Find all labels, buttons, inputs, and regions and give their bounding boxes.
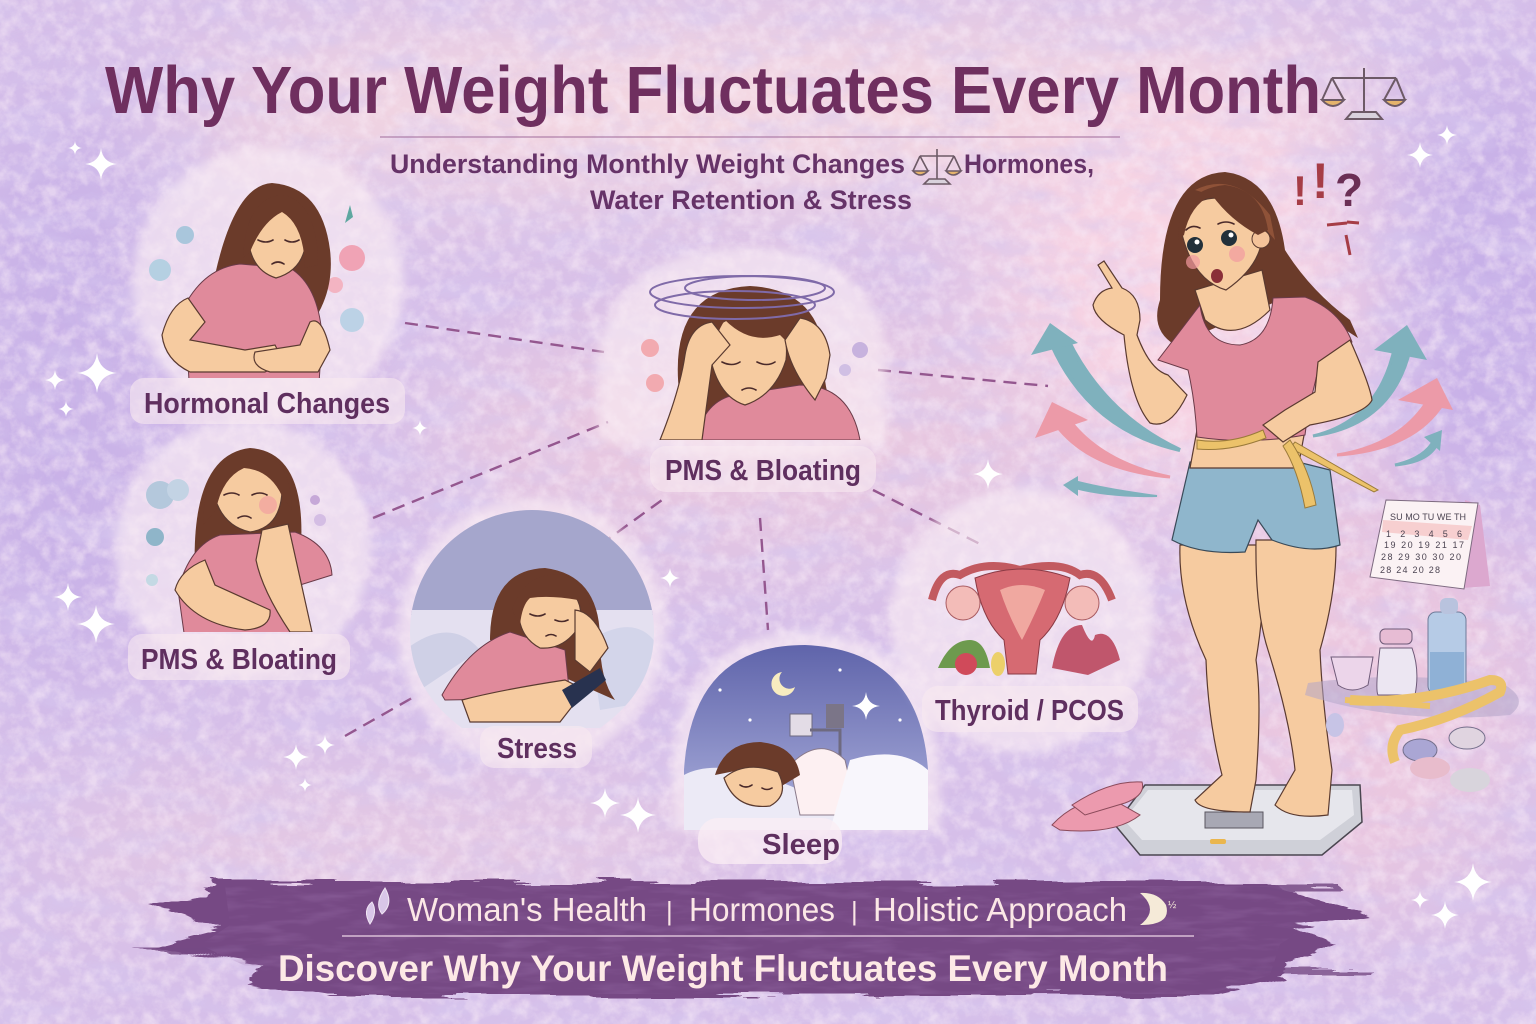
title: Why Your Weight Fluctuates Every Month — [105, 53, 1321, 128]
main figure: woman on scale — [1093, 172, 1378, 855]
label — [922, 686, 1138, 732]
calendar: 1 2 3 4 5 6 — [1386, 529, 1462, 539]
midriff — [1190, 430, 1305, 468]
scale — [1115, 785, 1362, 855]
stones — [1403, 739, 1437, 761]
banner: bottom brush stroke — [130, 882, 1370, 996]
vignette scene: woman holding head — [641, 286, 868, 440]
banner line 1: Holistic Approach — [873, 891, 1127, 928]
arrow: teal right — [1313, 325, 1427, 436]
label: Thyroid / PCOS — [935, 695, 1124, 727]
icon: droplets — [366, 888, 389, 924]
vignette scene: woman with phone in bed — [410, 510, 654, 728]
icon: exclamation and question marks: ? — [1335, 164, 1363, 216]
subtitle — [380, 137, 1120, 215]
subtitle line 1 right: Hormones, — [964, 149, 1094, 179]
arrow: teal small left — [1063, 476, 1157, 496]
icon: dizzy swirl — [650, 276, 834, 319]
items: cup, jar, water bottle, tape, stones — [1305, 598, 1519, 792]
eyes and mouth — [1186, 222, 1245, 283]
banner line 1: | — [851, 896, 858, 926]
connector lines — [345, 323, 1048, 736]
panel: stress — [398, 498, 666, 768]
arrows: fluctuation around main figure — [1031, 323, 1453, 496]
label — [128, 634, 350, 680]
icon: exclamation and question marks: ! — [1312, 153, 1329, 209]
icon: crescent moon — [1140, 893, 1167, 925]
icon: small balance scale in subtitle — [913, 149, 961, 184]
cup — [1331, 657, 1373, 690]
shorts — [1172, 462, 1340, 552]
panel: PMS & bloating (center) — [598, 248, 887, 492]
label: Stress — [497, 733, 577, 765]
label pill — [698, 818, 842, 864]
right arm and hand — [1263, 340, 1372, 442]
neck and chest — [1195, 270, 1270, 330]
label pill: Sleep — [762, 829, 840, 861]
arrow: teal left — [1031, 323, 1180, 450]
legs — [1180, 545, 1264, 812]
vignette scene: woman sleeping at night — [680, 640, 935, 830]
shirt — [1158, 297, 1352, 441]
tape roll — [1350, 680, 1501, 762]
panel: sleep — [672, 632, 940, 864]
left arm and pointing hand — [1093, 261, 1187, 424]
arrow: pink right — [1337, 378, 1453, 455]
jar — [1377, 629, 1417, 695]
arrow: teal small right — [1395, 430, 1442, 465]
label: PMS & Bloating — [665, 455, 861, 487]
hair back — [1157, 172, 1358, 345]
vignette scene: woman holding stomach — [149, 183, 365, 378]
calendar: 28 24 20 28 — [1380, 565, 1440, 575]
icon: exclamation and question marks — [1293, 153, 1363, 255]
label — [650, 446, 876, 492]
banner: bottom brush stroke: ½ — [1168, 900, 1177, 911]
vignette scene: uterus with produce — [932, 566, 1120, 676]
banner line 1: Hormones — [689, 891, 835, 928]
calendar: 28 29 30 30 20 — [1381, 552, 1461, 562]
icon: exclamation and question marks: ! — [1293, 167, 1307, 214]
label: PMS & Bloating — [141, 644, 337, 676]
banner line 2: Discover Why Your Weight Fluctuates Every Month — [278, 948, 1168, 989]
label — [480, 726, 592, 768]
calendar: 19 20 19 21 17 — [1384, 540, 1464, 550]
label — [130, 378, 405, 424]
tray shadow — [1305, 677, 1519, 718]
subtitle line 1 left: Understanding Monthly Weight Changes — [390, 149, 905, 179]
label: Hormonal Changes — [144, 388, 390, 420]
banner line 1: | — [666, 896, 673, 926]
icon: balance scale in title — [1322, 68, 1405, 119]
panel: hormonal changes — [130, 147, 405, 424]
face — [1181, 198, 1262, 290]
bottle — [1428, 598, 1466, 694]
panel: PMS & bloating (left) — [115, 420, 371, 680]
vignette scene: woman with hand on cheek — [146, 448, 332, 640]
subtitle line 2: Water Retention & Stress — [590, 185, 912, 215]
banner line 1 — [407, 891, 1127, 928]
measuring tape — [1197, 430, 1378, 508]
sparkles — [45, 125, 1492, 929]
arrow: pink left — [1035, 402, 1170, 477]
banner line 1: Woman's Health — [407, 891, 647, 928]
calendar — [1370, 500, 1490, 589]
panel: thyroid / PCOS — [890, 488, 1154, 752]
calendar: SU MO TU WE TH — [1390, 512, 1466, 522]
icon: slippers — [1052, 782, 1143, 831]
